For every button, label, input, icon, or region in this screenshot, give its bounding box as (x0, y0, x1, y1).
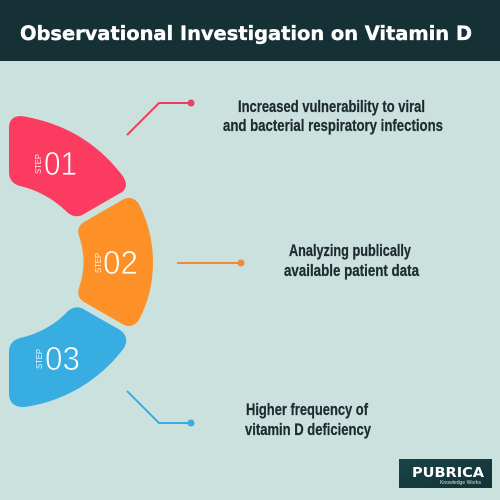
text: step 02 description (284, 242, 420, 280)
logo: Pubrica (399, 459, 492, 488)
text: step 03 description: Higher frequency of (246, 401, 368, 419)
step 01 panel: 01 (44, 145, 77, 182)
step 03 panel: 03 (45, 340, 80, 377)
text: step 02 description: Analyzing publically (289, 242, 412, 260)
text: step 02 description: available patient data (284, 262, 420, 280)
step 01 panel: STEP (33, 154, 43, 174)
step 02 panel (78, 198, 153, 326)
logo: Pubrica: Knowledge Works (440, 480, 481, 486)
connector arrow: step 01 (127, 100, 194, 135)
logo: Pubrica: PUBRICA (412, 465, 485, 481)
text: step 01 description: and bacterial respiratory infections (223, 117, 443, 135)
connector arrow: step 02 (177, 260, 244, 266)
step 03 panel (9, 307, 126, 407)
title banner: Observational Investigation on Vitamin D (20, 22, 472, 45)
text: step 03 description: vitamin D deficiency (245, 421, 372, 439)
step 03 panel: STEP (34, 349, 44, 369)
text: step 01 description (223, 98, 443, 135)
title banner (0, 0, 500, 61)
connector arrow: step 03 (127, 391, 194, 426)
step 02 panel: STEP (93, 253, 103, 273)
step 02 panel: 02 (103, 244, 138, 281)
text: step 03 description (245, 401, 372, 439)
step 01 panel (9, 116, 126, 216)
text: step 01 description: Increased vulnerability to viral (238, 98, 425, 116)
